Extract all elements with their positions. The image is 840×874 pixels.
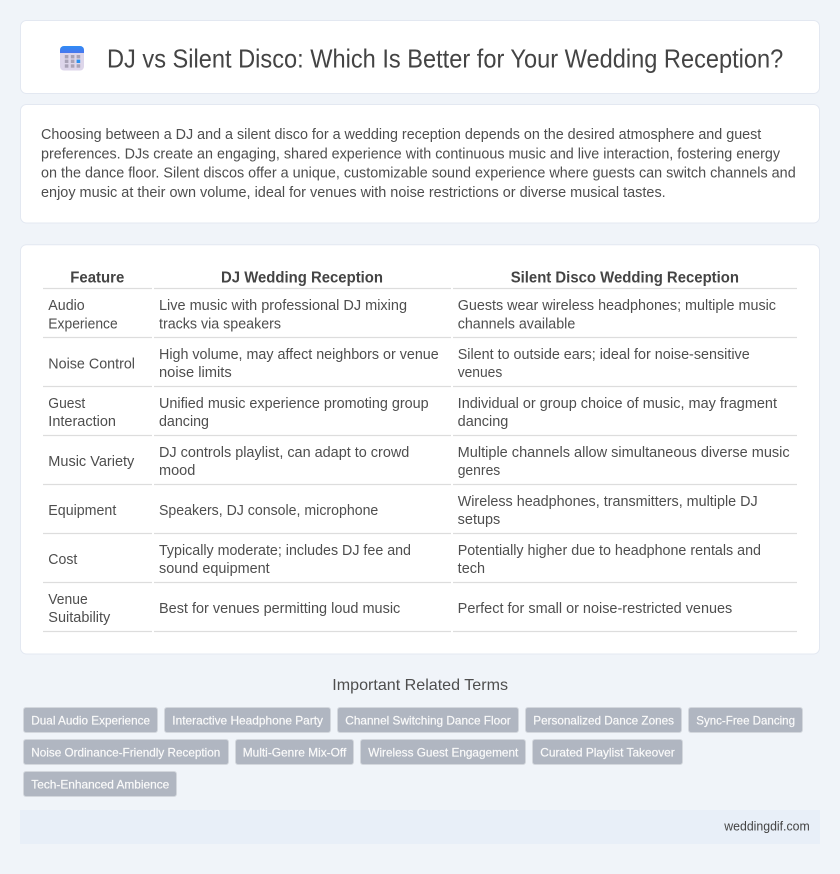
tag: wireless guest engagement	[360, 740, 526, 764]
row: noise control: Silent to outside ears; ideal for noise-sensitive	[458, 347, 750, 363]
intro paragraph: Choosing between a DJ and a silent disco for a wedding reception depends on the desired atmosphere and guest	[41, 127, 761, 143]
tag: curated playlist takeover	[532, 740, 682, 764]
intro paragraph	[41, 127, 796, 201]
tag: curated playlist takeover: Curated Playlist Takeover	[540, 745, 675, 759]
row: cost: Cost	[48, 552, 77, 568]
footer credit: weddingdif.com	[723, 819, 810, 834]
tag: tech-enhanced ambience	[24, 772, 176, 796]
row: venue suitability: Suitability	[48, 610, 111, 626]
tag: wireless guest engagement: Wireless Guest Engagement	[368, 745, 519, 759]
row: guest interaction: dancing	[458, 414, 508, 430]
row: cost: Typically moderate; includes DJ fee and	[159, 543, 411, 559]
row: audio experience: Audio	[48, 298, 85, 314]
tag: tech-enhanced ambience: Tech-Enhanced Ambience	[31, 777, 170, 791]
row: guest interaction: dancing	[159, 414, 209, 430]
row: noise control: High volume, may affect neighbors or venue	[159, 347, 439, 363]
panel: comparison table	[20, 245, 820, 654]
row: guest interaction: Guest	[48, 396, 85, 412]
row: equipment: Wireless headphones, transmitters, multiple DJ	[458, 494, 758, 510]
header panel	[20, 20, 820, 94]
tag: dual audio experience	[24, 708, 158, 732]
row: music variety: Multiple channels allow simultaneous diverse music	[458, 445, 790, 461]
row: venue suitability: Perfect for small or noise-restricted venues	[458, 601, 732, 617]
table header row: Silent Disco Wedding Reception	[511, 270, 739, 287]
table header row: Feature	[70, 270, 124, 287]
row: music variety: genres	[458, 463, 500, 479]
row: noise control: noise limits	[159, 365, 232, 381]
heading: important related terms: Important Related Terms	[332, 677, 508, 694]
tag: channel switching dance floor	[338, 708, 518, 732]
row: noise control: Noise Control	[48, 356, 135, 372]
row: venue suitability	[43, 592, 797, 632]
row: venue suitability: Best for venues permitting loud music	[159, 601, 400, 617]
row: noise control: venues	[458, 365, 502, 381]
row: guest interaction	[43, 396, 797, 436]
panel: introduction	[20, 104, 820, 223]
row: music variety: DJ controls playlist, can adapt to crowd	[159, 445, 409, 461]
intro paragraph: preferences. DJs create an engaging, shared experience with continuous music and live interaction, fostering energy	[41, 146, 781, 162]
footer bar	[20, 810, 820, 844]
row: equipment: setups	[458, 512, 500, 528]
tag: personalized dance zones: Personalized Dance Zones	[533, 713, 674, 727]
tag: sync-free dancing	[688, 708, 802, 732]
row: music variety	[43, 445, 797, 484]
tag: noise ordinance-friendly reception	[24, 740, 228, 764]
tag: dual audio experience: Dual Audio Experience	[31, 713, 150, 727]
row: music variety: Music Variety	[48, 454, 135, 470]
row: audio experience	[43, 298, 797, 338]
icon: calendar	[60, 46, 84, 70]
tag: channel switching dance floor: Channel Switching Dance Floor	[345, 713, 511, 727]
row: venue suitability: Venue	[48, 592, 88, 608]
row: equipment	[43, 494, 797, 534]
row: audio experience: Experience	[48, 316, 118, 332]
tag: personalized dance zones	[526, 708, 682, 732]
row: guest interaction: Interaction	[48, 414, 116, 430]
tag: noise ordinance-friendly reception: Noise Ordinance-Friendly Reception	[31, 745, 220, 759]
row: noise control	[43, 347, 797, 386]
intro paragraph: enjoy music at their own volume, ideal for venues with noise restrictions or diverse musical tastes.	[41, 185, 666, 201]
table header row	[43, 270, 797, 288]
row: audio experience: channels available	[458, 316, 575, 332]
row: guest interaction: Individual or group choice of music, may fragment	[458, 396, 777, 412]
row: music variety: mood	[159, 463, 195, 479]
row: cost: Potentially higher due to headphone rentals and	[458, 543, 761, 559]
row: cost: tech	[458, 561, 485, 577]
row: guest interaction: Unified music experience promoting group	[159, 396, 429, 412]
tag: multi-genre mix-off	[236, 740, 354, 764]
title: DJ vs Silent Disco: Which Is Better for Your Wedding Reception?	[107, 46, 783, 74]
row: cost: sound equipment	[159, 561, 270, 577]
intro paragraph: on the dance floor. Silent discos offer a unique, customizable sound experience where guests can switch channels and	[41, 166, 796, 182]
row: cost	[43, 543, 797, 582]
row: equipment: Speakers, DJ console, microphone	[159, 503, 378, 519]
tag list	[24, 708, 802, 796]
tag: multi-genre mix-off: Multi-Genre Mix-Off	[243, 745, 347, 759]
row: audio experience: Guests wear wireless headphones; multiple music	[458, 298, 776, 314]
row: audio experience: tracks via speakers	[159, 316, 281, 332]
tag: interactive headphone party: Interactive Headphone Party	[172, 713, 323, 727]
table header row: DJ Wedding Reception	[221, 270, 383, 287]
row: audio experience: Live music with professional DJ mixing	[159, 298, 407, 314]
tag: sync-free dancing: Sync-Free Dancing	[696, 713, 795, 727]
row: equipment: Equipment	[48, 503, 116, 519]
tag: interactive headphone party	[164, 708, 330, 732]
